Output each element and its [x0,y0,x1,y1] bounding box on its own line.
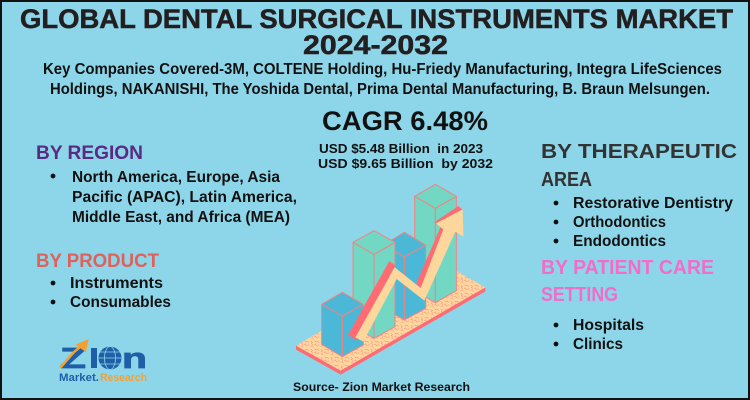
therapeutic area list: Endodontics [573,233,666,250]
heading: by therapeutic area: BY THERAPEUTIC [541,141,737,163]
panel: by product [36,250,171,311]
bar 4 [415,184,456,303]
heading: by patient care setting: SETTING [541,284,618,306]
logo: Zion Market Research [59,341,147,384]
bar 2 [353,231,395,338]
product list: Consumables [70,294,171,311]
key companies text [43,61,722,98]
heading: by patient care setting: BY PATIENT CARE [541,257,714,279]
CAGR heading: CAGR 6.48% [322,106,488,136]
bar 3 [383,232,426,320]
key companies text: Holdings, NAKANISHI, The Yoshida Dental, Prima Dental Manufacturing, B. Braun Melsungen. [50,81,710,98]
patient care list: Clinics [573,336,623,353]
bar 1 [322,292,363,357]
arrow [348,206,463,342]
market size text: USD $5.48 Billion in 2023 [319,141,483,156]
platform [296,262,485,375]
title: GLOBAL DENTAL SURGICAL INSTRUMENTS MARKET [20,4,733,34]
logo letter n: n [122,343,147,375]
logo tagline: Market. [59,372,99,384]
logo tagline: Research [100,372,147,384]
logo tagline [59,372,147,384]
source note: Source- Zion Market Research [293,380,470,394]
therapeutic area list: Restorative Dentistry [573,195,733,212]
logo letter Z: Z [60,343,86,375]
title: 2024-2032 [303,30,448,60]
logo globe [98,346,122,370]
heading: by therapeutic area: AREA [541,169,592,191]
panel: by region [36,142,297,226]
heading: by patient care setting [541,257,714,306]
logo letter i [91,348,97,368]
product list: Instruments [70,275,163,292]
heading: by region: BY REGION [36,142,143,164]
region list: Pacific (APAC), Latin America, [72,189,297,206]
key companies text: Key Companies Covered-3M, COLTENE Holding, Hu-Friedy Manufacturing, Integra LifeSciences [43,61,722,78]
panel: by therapeutic area [541,141,737,250]
patient care list: Hospitals [573,317,644,334]
panel: by patient care setting [541,257,714,353]
market size text: USD $9.65 Billion by 2032 [318,156,493,171]
region list [51,169,297,226]
region list: Middle East, and Africa (MEA) [72,209,290,226]
chart: isometric bars with rising arrow [296,184,485,375]
patient care list [554,317,644,353]
heading: by product: BY PRODUCT [36,250,159,272]
product list [51,275,171,311]
heading: by therapeutic area [541,141,737,191]
region list: North America, Europe, Asia [72,169,280,186]
therapeutic area list [554,195,733,250]
market size text [318,141,493,171]
title [20,4,733,60]
therapeutic area list: Orthodontics [573,214,666,231]
logo arrow [60,341,87,368]
